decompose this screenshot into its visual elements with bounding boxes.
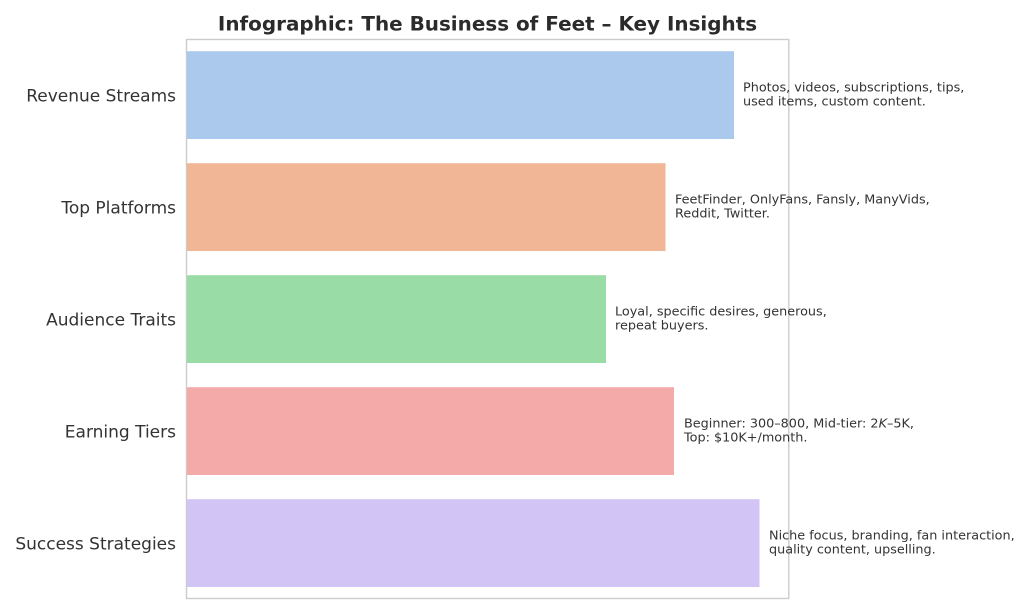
row: Audience Traits: Loyal, specific desires, generous, [615, 304, 827, 320]
row: Success Strategies: Success Strategies [15, 534, 176, 554]
row: Top Platforms [60, 163, 930, 251]
row: Audience Traits: Audience Traits [46, 310, 176, 330]
row: Earning Tiers: Earning Tiers [65, 422, 176, 442]
chart frame [186, 40, 789, 598]
row: Success Strategies: quality content, upselling. [769, 542, 936, 558]
row: Earning Tiers: Top: $10K+/month. [683, 430, 807, 446]
row: Revenue Streams: Revenue Streams [26, 86, 176, 106]
row: Top Platforms: Reddit, Twitter. [675, 206, 770, 222]
row: Earning Tiers: Beginner: 300–800, Mid-tier: 2K–5K, [684, 416, 914, 432]
row: Top Platforms: FeetFinder, OnlyFans, Fansly, ManyVids, [675, 192, 930, 208]
row: Success Strategies [15, 499, 1015, 587]
row: Revenue Streams: Photos, videos, subscriptions, tips, [743, 80, 964, 96]
title: Infographic: The Business of Feet – Key Insights [218, 12, 757, 36]
row: Earning Tiers [65, 387, 914, 475]
row: Audience Traits [46, 275, 827, 363]
row: Revenue Streams [26, 51, 964, 139]
row: Success Strategies: Niche focus, branding, fan interaction, [769, 528, 1015, 544]
row: Audience Traits: repeat buyers. [615, 318, 708, 334]
row: Revenue Streams: used items, custom content. [743, 94, 926, 110]
row: Top Platforms: Top Platforms [60, 198, 176, 218]
